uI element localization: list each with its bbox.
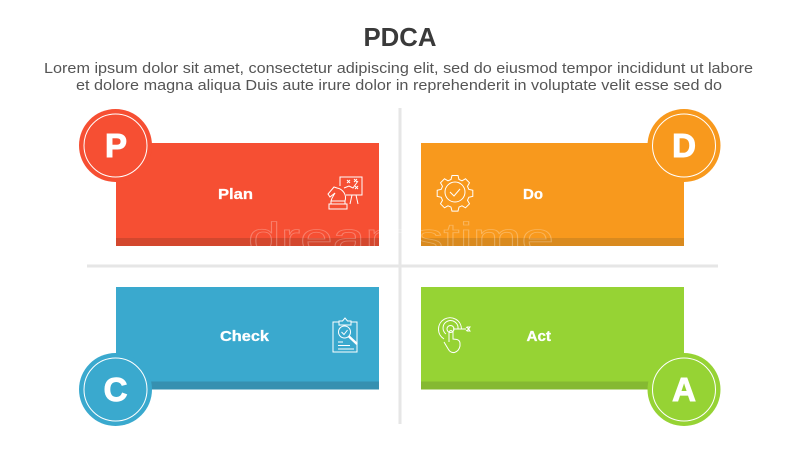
label: act: Act (526, 328, 551, 345)
subtitle text: Lorem ipsum dolor sit amet, consectetur adipiscing elit, sed do eiusmod tempor incididunt ut labore (44, 60, 753, 77)
label: plan: Plan (218, 186, 253, 203)
badge: D: D (672, 127, 696, 164)
icon: chess knight and strategy board (328, 177, 362, 209)
panel: act (421, 287, 720, 426)
icon: gear with check (437, 176, 473, 211)
panel: check (79, 287, 379, 426)
badge: C (79, 353, 152, 426)
badge: A: A (672, 371, 696, 408)
badge: P: P (105, 127, 127, 164)
panel: plan (79, 109, 379, 246)
watermark: dreamstime (248, 214, 554, 261)
icon: target with pointing hand (439, 318, 470, 353)
badge: A (648, 353, 720, 426)
title: PDCA (364, 22, 437, 52)
badge: P (79, 109, 152, 182)
badge: D (648, 109, 720, 182)
subtitle text: et dolore magna aliqua Duis aute irure dolor in reprehenderit in voluptate velit esse sed do (76, 77, 722, 94)
label: do: Do (523, 186, 543, 203)
panel: do (421, 109, 720, 246)
label: check: Check (220, 328, 270, 345)
subtitle text (44, 60, 753, 94)
badge: C: C (104, 371, 127, 408)
icon: clipboard with magnifier (333, 318, 357, 352)
